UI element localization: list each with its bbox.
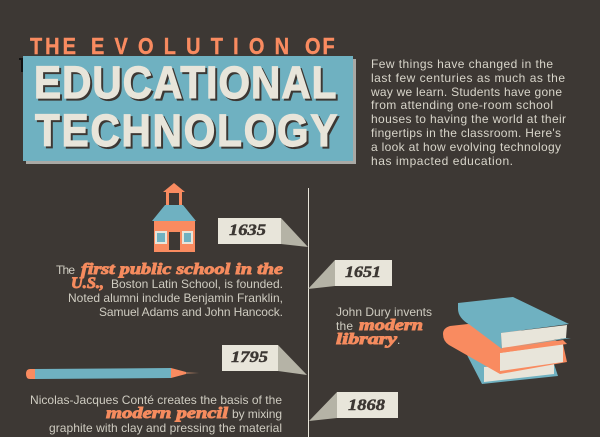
title line: the evolution of: THE	[30, 32, 76, 59]
bottom teal book	[467, 355, 558, 384]
title line: educational technology: EDUCATIONAL	[36, 60, 338, 111]
text block: modern pencil: modern pencil	[106, 405, 229, 422]
year tag: 1795: 1795	[231, 349, 268, 366]
title line: educational technology: TECHNOLOGY	[37, 108, 339, 159]
year tag: 1651: 1651	[345, 264, 381, 281]
text block: modern pencil	[30, 393, 282, 435]
title line: educational technology: TECHNOLOGY	[35, 106, 337, 157]
intro text: houses to having the world at their	[371, 112, 566, 126]
year tag: 1868: 1868	[348, 397, 385, 414]
year tag: 1651	[308, 260, 392, 289]
intro text: has impacted education.	[371, 154, 513, 168]
text block: first public school: The	[56, 263, 75, 277]
title line: educational technology	[34, 58, 339, 159]
intro text: Few things have changed in the	[371, 57, 553, 71]
timeline axis	[308, 188, 309, 437]
text block: first public school: Samuel Adams and John Hancock.	[99, 305, 283, 319]
text block: modern pencil: Nicolas-Jacques Conté creates the basis of the	[30, 393, 282, 407]
icon: stack of books	[443, 297, 571, 384]
text block: modern library: library	[336, 331, 398, 348]
top teal book	[458, 297, 571, 349]
text block: modern library: .	[397, 333, 400, 347]
icon: schoolhouse	[152, 183, 196, 252]
intro text: way we learn. Students have gone	[370, 85, 562, 99]
year tag: 1635: 1635	[229, 222, 266, 239]
intro text: a look at how evolving technology	[371, 140, 561, 154]
icon: pencil	[26, 368, 199, 379]
text block: first public school: Boston Latin School, is founded.	[111, 277, 283, 291]
intro text: last few centuries as much as the	[371, 71, 565, 85]
intro text: from attending one-room school	[371, 98, 553, 112]
title	[19, 32, 356, 164]
intro text	[370, 57, 566, 168]
text block: modern library	[336, 305, 432, 348]
text block: modern library: the	[336, 319, 353, 333]
text block: first public school: Noted alumni include Benjamin Franklin,	[68, 291, 283, 305]
text block: modern library: modern	[359, 317, 423, 334]
text block: modern library: John Dury invents	[336, 305, 432, 319]
title line: the evolution of	[30, 32, 335, 59]
text block: first public school: first public school in the	[81, 261, 283, 278]
text block: modern pencil: graphite with clay and pressing the material	[49, 421, 282, 435]
title line: educational technology: EDUCATIONAL	[34, 58, 336, 109]
title line: the evolution of: EVOLUTION	[91, 32, 289, 59]
year tag: 1868	[309, 392, 398, 421]
intro text: fingertips in the classroom. Here's	[371, 126, 561, 140]
text block: first public school	[56, 261, 283, 319]
text block: first public school: U.S.,	[71, 275, 104, 292]
year tag: 1795	[222, 345, 307, 375]
middle orange book	[443, 324, 567, 374]
year tag: 1635	[218, 218, 308, 247]
text block: modern pencil: by mixing	[232, 407, 282, 421]
title line: the evolution of: OF	[305, 32, 335, 59]
